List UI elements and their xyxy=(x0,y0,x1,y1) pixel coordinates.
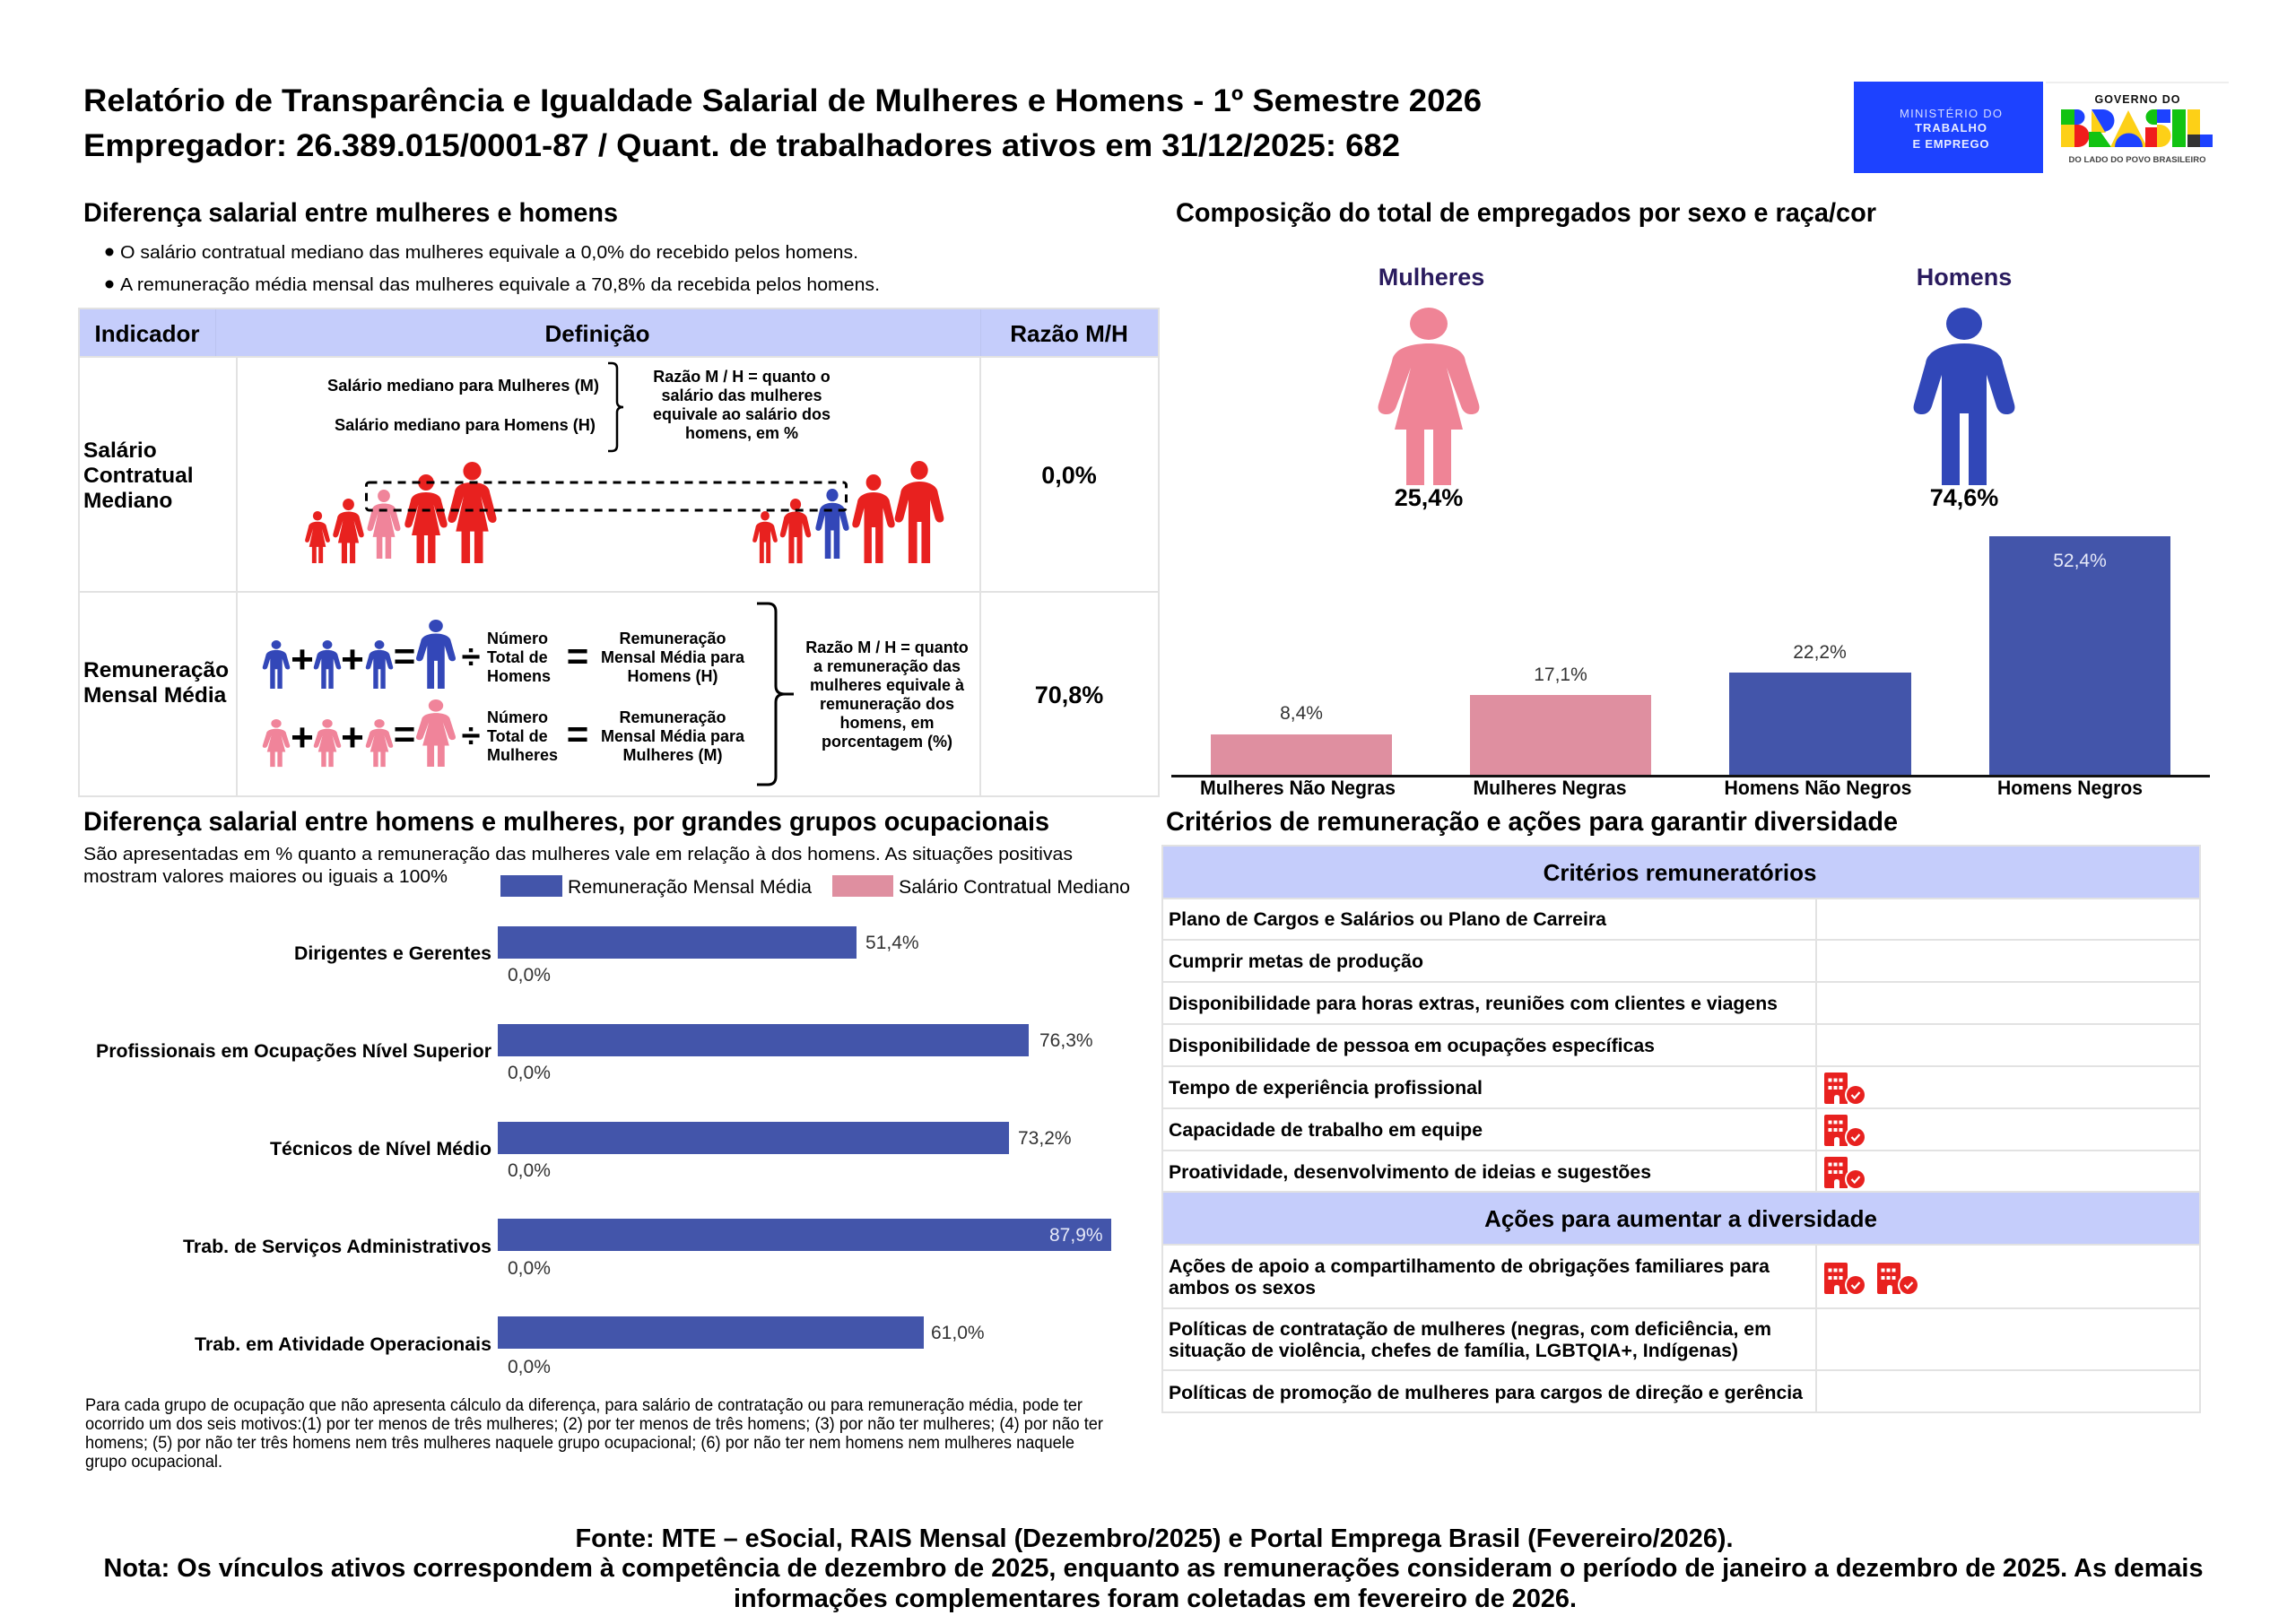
actions list: Ações de apoio a compartilhamento de obrigações familiares para xyxy=(1169,1255,1770,1277)
mulheres xyxy=(1378,264,1484,511)
table header: Definição xyxy=(544,320,650,347)
title: Empregador: 26.389.015/0001-87 / Quant. de trabalhadores ativos em 31/12/2025: 682 xyxy=(83,127,1400,163)
mulheres: Mulheres xyxy=(1378,264,1484,291)
bullets: resumo: O salário contratual mediano das mulheres equivale a 0,0% do recebido pelos homens. xyxy=(120,242,858,263)
bar: homens negros: 52,4% xyxy=(2053,551,2107,571)
group: profissionais: 76,3% xyxy=(1039,1030,1093,1051)
title: Relatório de Transparência e Igualdade Salarial de Mulheres e Homens - 1º Semestre 2026 xyxy=(83,83,1482,118)
brace: salário xyxy=(608,363,623,451)
bar: mulheres não negras: 8,4% xyxy=(1280,703,1323,724)
footnote: grupo ocupacional. xyxy=(85,1453,222,1472)
homens: Homens xyxy=(1917,264,2012,291)
definition: razão remuneração xyxy=(805,638,969,751)
heading: diferença por grupos: Diferença salarial entre homens e mulheres, por grandes grupos ocupacionais xyxy=(83,807,1049,837)
actions list: Políticas de contratação de mulheres (negras, com deficiência, em xyxy=(1169,1318,1771,1340)
heading: composição: Composição do total de empregados por sexo e raça/cor xyxy=(1176,198,1877,228)
logo: Ministério do Trabalho e Emprego: TRABALHO xyxy=(1915,121,1987,135)
value: 0,0%: 0,0% xyxy=(1041,462,1097,489)
bar: mulheres não negras xyxy=(1200,703,1396,799)
table header: Razão M/H xyxy=(1010,320,1128,347)
header: ações para aumentar a diversidade xyxy=(1162,1192,2200,1245)
logo: Governo do Brasil xyxy=(2046,82,2229,165)
bar: mulheres negras xyxy=(1470,664,1651,799)
definition: razão salário: equivale ao salário dos xyxy=(653,405,831,423)
group: atividade operacional: Trab. em Atividade Operacionais xyxy=(195,1333,491,1355)
logo: Ministério do Trabalho e Emprego: MINISTÉRIO DO xyxy=(1900,107,2002,120)
formula: mulheres: + xyxy=(341,716,364,760)
bullets: resumo xyxy=(106,242,880,295)
title xyxy=(83,83,1482,163)
description: grupos ocupacionais xyxy=(83,845,1073,887)
group: técnicos: Técnicos de Nível Médio xyxy=(270,1138,491,1159)
icons: ações xyxy=(1824,1263,1919,1296)
legend xyxy=(500,875,1130,898)
criteria list: Tempo de experiência profissional xyxy=(1169,1077,1483,1099)
mulheres: 25,4% xyxy=(1395,484,1463,511)
footnote: Para cada grupo de ocupação que não apresenta cálculo da diferença, para salário de contratação ou para remuneração média, pode ter xyxy=(85,1396,1083,1415)
formula: mulheres xyxy=(263,699,745,767)
actions list xyxy=(1169,1255,1804,1403)
formula: homens: Homens xyxy=(487,667,551,685)
logo: Ministério do Trabalho e Emprego: E EMPREGO xyxy=(1912,137,1989,151)
bullets: resumo: A remuneração média mensal das mulheres equivale a 70,8% da recebida pelos homens. xyxy=(120,274,880,295)
footnote: ocorrido um dos seis motivos:(1) por ter menos de três mulheres; (2) por ter menos de três homens; (3) por não ter mulheres; (4) por não ter xyxy=(85,1415,1104,1434)
formula: mulheres: Mensal Média para xyxy=(601,727,745,745)
group: serviços administrativos xyxy=(183,1219,1111,1279)
definition: razão salário: Razão M / H = quanto o xyxy=(653,368,831,386)
row label: remuneração mensal média xyxy=(83,658,229,708)
heading: diferença salarial: Diferença salarial entre mulheres e homens xyxy=(83,198,618,228)
footnote: homens; (5) por não ter três homens nem três mulheres naquele grupo ocupacional; (6) por não ter nem homens nem mulheres naquele xyxy=(85,1434,1074,1453)
formula: mulheres: Mulheres (M) xyxy=(622,746,723,764)
formula: mulheres: Remuneração xyxy=(619,708,726,726)
criteria list: Proatividade, desenvolvimento de ideias e sugestões xyxy=(1169,1161,1651,1183)
source and note xyxy=(104,1524,2203,1613)
panel: tabela de indicadores xyxy=(79,308,1159,796)
brace: remuneração xyxy=(757,604,794,785)
homens: 74,6% xyxy=(1930,484,1998,511)
formula: homens: + xyxy=(291,638,314,682)
dashed median box xyxy=(366,482,847,510)
bar: homens não negros xyxy=(1724,642,1912,799)
group: dirigentes e gerentes: 0,0% xyxy=(508,965,551,986)
logo: Ministério do Trabalho e Emprego xyxy=(1854,82,2043,173)
definition: razão remuneração: porcentagem (%) xyxy=(822,733,952,751)
bar: mulheres não negras: Mulheres Não Negras xyxy=(1200,777,1396,799)
definition: salário mediano labels: Salário mediano para Homens (H) xyxy=(335,416,596,434)
legend: Remuneração Mensal Média xyxy=(568,877,812,898)
formula: homens: = xyxy=(567,635,588,677)
table header: Indicador xyxy=(94,320,200,347)
definition: razão salário: salário das mulheres xyxy=(661,386,822,404)
panel: critérios e ações xyxy=(1162,846,2200,1412)
definition: razão remuneração: a remuneração das xyxy=(813,657,961,675)
group: técnicos: 73,2% xyxy=(1018,1128,1072,1149)
bar chart: raça/cor xyxy=(1171,536,2210,799)
definition: razão remuneração: remuneração dos xyxy=(820,695,954,713)
definition: razão salário: homens, em % xyxy=(685,424,798,442)
formula: homens: = xyxy=(394,635,415,677)
criteria list: Cumprir metas de produção xyxy=(1169,951,1423,972)
row label: remuneração mensal média: Remuneração xyxy=(83,658,229,682)
footnote xyxy=(85,1396,1104,1472)
group: técnicos: 0,0% xyxy=(508,1160,551,1181)
group: profissionais: Profissionais em Ocupações Nível Superior xyxy=(96,1040,492,1062)
formula: homens: Remuneração xyxy=(619,630,726,647)
logo: Governo do Brasil: GOVERNO DO xyxy=(2095,93,2180,106)
bar: homens não negros: Homens Não Negros xyxy=(1724,777,1912,799)
row label: salário contratual mediano xyxy=(83,439,194,513)
description: grupos ocupacionais: mostram valores maiores ou iguais a 100% xyxy=(83,867,448,887)
row label: salário contratual mediano: Contratual xyxy=(83,464,194,488)
source and note: informações complementares foram coletadas em fevereiro de 2026. xyxy=(734,1585,1577,1613)
criteria list: Disponibilidade de pessoa em ocupações específicas xyxy=(1169,1035,1655,1056)
figures: mulheres ordenadas xyxy=(305,462,497,563)
group: atividade operacional: 61,0% xyxy=(931,1323,985,1343)
formula: homens xyxy=(263,620,745,689)
formula: mulheres: + xyxy=(291,716,314,760)
group: técnicos xyxy=(270,1122,1072,1181)
figures: homens ordenados xyxy=(752,461,944,563)
formula: mulheres: Total de xyxy=(487,727,548,745)
definition: razão remuneração: mulheres equivale à xyxy=(810,676,965,694)
group: serviços administrativos: 87,9% xyxy=(1049,1225,1103,1246)
bar: homens negros xyxy=(1989,536,2170,799)
row label: remuneração mensal média: Mensal Média xyxy=(83,683,227,708)
description: grupos ocupacionais: São apresentadas em % quanto a remuneração das mulheres vale em relação à dos homens. As situações positivas xyxy=(83,845,1073,864)
definition: razão remuneração: homens, em xyxy=(839,714,935,732)
group: dirigentes e gerentes: 51,4% xyxy=(865,933,919,953)
formula: homens: + xyxy=(341,638,364,682)
row label: salário contratual mediano: Salário xyxy=(83,439,157,463)
homens xyxy=(1914,264,2014,511)
group: serviços administrativos: 0,0% xyxy=(508,1258,551,1279)
table header xyxy=(79,308,1159,357)
formula: mulheres: ÷ xyxy=(462,717,480,755)
source and note: Nota: Os vínculos ativos correspondem à competência de dezembro de 2025, enquanto as remunerações consideram o período de janeiro a dezembro de 2025. As demais xyxy=(104,1554,2203,1583)
panel: composição por sexo xyxy=(1378,264,2014,511)
actions list: Políticas de promoção de mulheres para cargos de direção e gerência xyxy=(1169,1382,1804,1403)
criteria list: Plano de Cargos e Salários ou Plano de Carreira xyxy=(1169,908,1607,930)
icons: critérios xyxy=(1824,1073,1866,1190)
bar: mulheres negras: Mulheres Negras xyxy=(1473,777,1627,799)
formula: mulheres: = xyxy=(394,713,415,755)
value: 70,8%: 70,8% xyxy=(1035,682,1103,708)
bar: homens negros: Homens Negros xyxy=(1997,777,2143,799)
actions list: situação de violência, chefes de família, LGBTQIA+, Indígenas) xyxy=(1169,1340,1738,1361)
header: critérios remuneratórios xyxy=(1162,846,2200,899)
bar: homens não negros: 22,2% xyxy=(1793,642,1847,663)
formula: mulheres: Número xyxy=(487,708,548,726)
logo: Governo do Brasil: DO LADO DO POVO BRASILEIRO xyxy=(2068,155,2206,165)
criteria list xyxy=(1169,908,1778,1183)
group: serviços administrativos: Trab. de Serviços Administrativos xyxy=(183,1236,491,1257)
actions list: ambos os sexos xyxy=(1169,1277,1316,1298)
bar chart: grupos ocupacionais xyxy=(96,926,1111,1377)
definition: razão remuneração: Razão M / H = quanto xyxy=(805,638,969,656)
heading: critérios: Critérios de remuneração e ações para garantir diversidade xyxy=(1166,807,1898,837)
source and note: Fonte: MTE – eSocial, RAIS Mensal (Dezembro/2025) e Portal Emprega Brasil (Fevereiro/2026). xyxy=(576,1524,1733,1553)
header: ações para aumentar a diversidade: Ações para aumentar a diversidade xyxy=(1484,1205,1877,1232)
header: critérios remuneratórios: Critérios remuneratórios xyxy=(1544,859,1816,886)
group: dirigentes e gerentes xyxy=(294,926,919,986)
row label: salário contratual mediano: Mediano xyxy=(83,489,172,513)
group: profissionais xyxy=(96,1024,1093,1083)
formula: homens: Homens (H) xyxy=(627,667,718,685)
definition: razão salário xyxy=(653,368,831,442)
bar: mulheres negras: 17,1% xyxy=(1534,664,1587,685)
criteria list: Disponibilidade para horas extras, reuniões com clientes e viagens xyxy=(1169,993,1778,1014)
group: atividade operacional xyxy=(195,1316,985,1377)
definition: salário mediano labels: Salário mediano para Mulheres (M) xyxy=(327,377,599,395)
group: profissionais: 0,0% xyxy=(508,1063,551,1083)
formula: homens: Número xyxy=(487,630,548,647)
criteria list: Capacidade de trabalho em equipe xyxy=(1169,1119,1483,1141)
formula: homens: ÷ xyxy=(462,638,480,676)
definition: salário mediano labels xyxy=(327,377,599,434)
formula: mulheres: = xyxy=(567,713,588,755)
group: atividade operacional: 0,0% xyxy=(508,1357,551,1377)
formula: homens: Total de xyxy=(487,648,548,666)
group: dirigentes e gerentes: Dirigentes e Gerentes xyxy=(294,942,491,964)
legend: Salário Contratual Mediano xyxy=(899,877,1130,898)
formula: homens: Mensal Média para xyxy=(601,648,745,666)
formula: mulheres: Mulheres xyxy=(487,746,558,764)
